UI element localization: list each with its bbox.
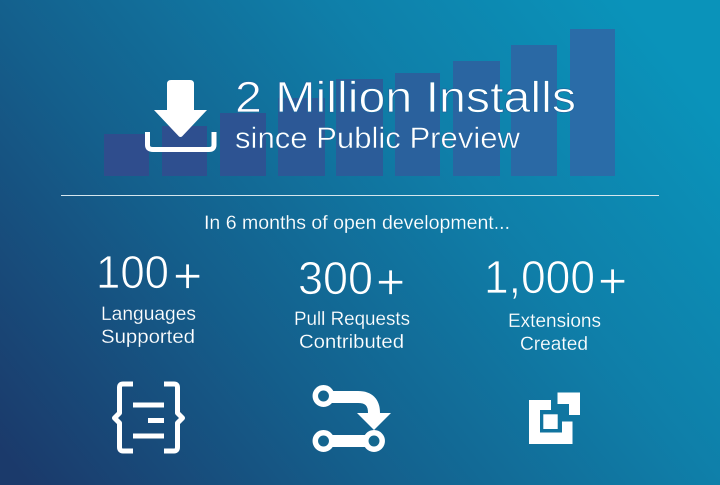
- intro text: In 6 months of open development...: [204, 213, 510, 234]
- stat label: Created: [520, 334, 588, 355]
- stat: languages supported: [96, 246, 202, 348]
- title: 2 Million Installs: [235, 73, 576, 122]
- stat label: Contributed: [299, 332, 404, 353]
- stat label: Extensions: [508, 311, 601, 332]
- stat number: +: [173, 248, 202, 304]
- stat number: 300: [298, 252, 373, 304]
- stat: pull requests contributed: [294, 252, 410, 353]
- stat number: +: [598, 253, 627, 309]
- icon: extensions: [529, 392, 580, 444]
- stat label: Languages: [101, 304, 196, 325]
- stat label: [294, 309, 410, 353]
- divider: [61, 195, 659, 196]
- icon: code braces: [114, 384, 182, 451]
- subtitle: since Public Preview: [235, 122, 520, 155]
- stat label: [101, 304, 196, 348]
- stat number: 1,000: [484, 251, 595, 303]
- stat label: Pull Requests: [294, 309, 410, 330]
- icon: download: [148, 80, 214, 150]
- stat number: [96, 246, 202, 304]
- bar chart: install growth: [104, 29, 615, 176]
- stat number: +: [376, 254, 405, 310]
- stat label: Supported: [101, 327, 195, 348]
- stat label: [508, 311, 601, 355]
- icon: pull request: [315, 388, 391, 449]
- stat number: 100: [96, 246, 169, 298]
- stat: extensions created: [484, 251, 627, 355]
- stat number: [298, 252, 405, 310]
